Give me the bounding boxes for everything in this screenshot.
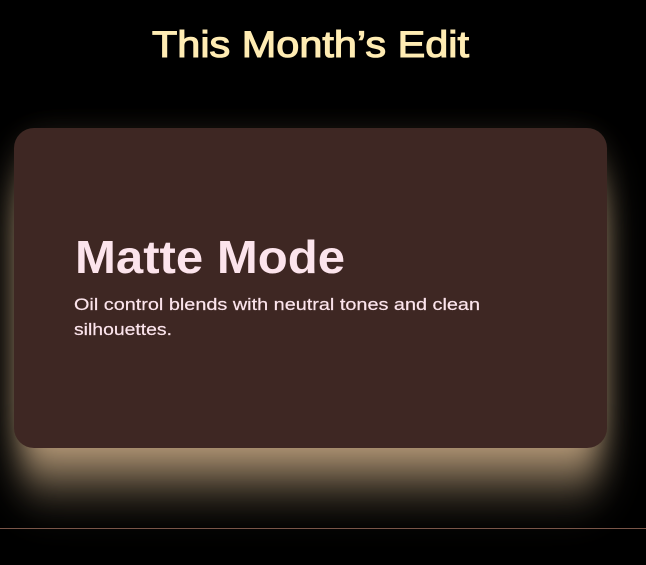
card description: Oil control blends with neutral tones and clean <box>74 295 480 314</box>
card description <box>74 295 480 339</box>
card heading: Matte Mode <box>75 231 345 283</box>
divider line <box>0 528 646 529</box>
panel: feature card <box>14 128 607 448</box>
title: This Month’s Edit <box>152 24 470 65</box>
card description: silhouettes. <box>74 320 172 339</box>
